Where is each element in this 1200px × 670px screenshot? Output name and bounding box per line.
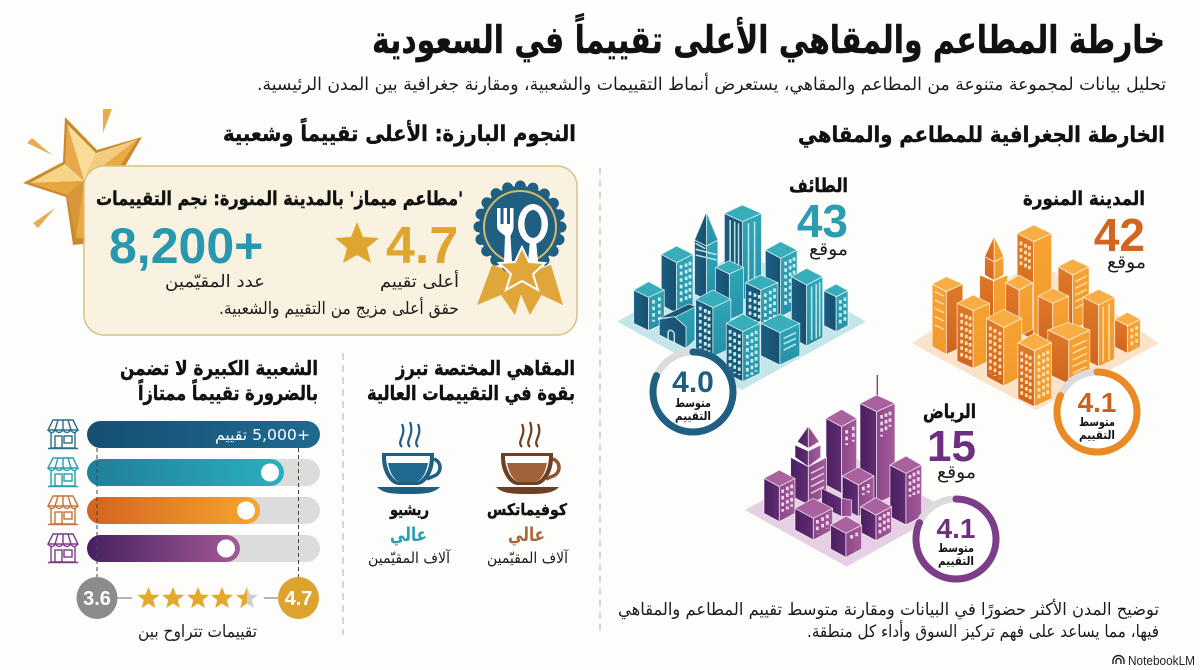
- high rating brown: عالي: [508, 524, 545, 546]
- map explanation text: توضيح المدن الأكثر حضورًا في البيانات ومقارنة متوسط تقييم المطاعم والمقاهي: [618, 599, 1159, 620]
- high rating teal: عالي: [390, 524, 427, 546]
- icon: store orange: [48, 496, 78, 524]
- icon: store purple: [48, 534, 78, 562]
- map explanation text: [618, 599, 1159, 642]
- Taif rating ring: [653, 352, 733, 432]
- reviewers value: 8,200+: [109, 218, 263, 274]
- reviewers note 2: آلاف المقيّمين: [368, 549, 451, 567]
- Medina rating ring: متوسط: [1079, 415, 1115, 430]
- heading: specialty coffee: [367, 356, 575, 406]
- heading: popularity: بالضرورة تقييماً ممتازاً: [138, 379, 318, 405]
- Medina rating ring: 4.1: [1078, 387, 1116, 418]
- Riyadh rating ring: متوسط: [938, 541, 974, 556]
- Taif rating ring: متوسط: [675, 396, 711, 411]
- Taif name: الطائف: [789, 175, 848, 197]
- Riyadh unit: موقع: [937, 462, 976, 483]
- Riyadh rating ring: التقييم: [938, 554, 974, 568]
- Taif count: 43: [797, 195, 848, 247]
- panel: specialty coffee: [367, 356, 575, 567]
- Medina count: 42: [1094, 209, 1145, 261]
- Medina rating ring: [1057, 372, 1137, 452]
- Taif unit: موقع: [809, 239, 848, 260]
- rating range scale: 3.6: [83, 588, 111, 610]
- reviewers label: عدد المقيّمين: [165, 272, 265, 292]
- heading: popularity: الشعبية الكبيرة لا تضمن: [120, 356, 318, 380]
- panel: Riyadh city: [745, 375, 996, 579]
- range caption: تقييمات تتراوح بين: [138, 622, 257, 642]
- map explanation text: فيها، مما يساعد على فهم تركيز السوق وأداء كل منطقة.: [807, 620, 1159, 642]
- rating range scale: [76, 577, 319, 619]
- Medina name: المدينة المنورة: [1023, 188, 1145, 210]
- heading: specialty coffee: بقوة في التقييمات العالية: [367, 381, 575, 406]
- heading: geographic map: الخارطة الجغرافية للمطاعم والمقاهي: [798, 123, 1165, 148]
- illustration: Medina buildings: [912, 225, 1159, 410]
- Taif rating ring: 4.0: [672, 366, 714, 399]
- card title: 'مطاعم ميماز' بالمدينة المنورة: نجم التقييمات: [96, 188, 463, 210]
- rating value: 4.7: [386, 217, 458, 275]
- panel: featured restaurant card: [84, 166, 577, 335]
- icon: big gold star: [23, 109, 142, 245]
- card note: حقق أعلى مزيج من التقييم والشعبية.: [219, 297, 459, 319]
- bar chart: [87, 421, 320, 577]
- Riyadh rating ring: 4.1: [937, 513, 975, 544]
- heading: top stars: النجوم البارزة: الأعلى تقييماً وشعبية: [223, 117, 576, 147]
- illustration: Riyadh buildings: [745, 375, 948, 567]
- rating label: أعلى تقييم: [380, 270, 459, 292]
- illustration: Taif buildings: [617, 205, 866, 390]
- icon: blue coffee cup: [377, 422, 440, 494]
- cafe name: Coffeematics: كوفيماتكس: [487, 500, 568, 519]
- Riyadh name: الرياض: [923, 401, 976, 423]
- icon: store navy: [48, 420, 78, 448]
- icon: rosette badge: [477, 186, 563, 315]
- subtitle: تحليل بيانات لمجموعة متنوعة من المطاعم والمقاهي، يستعرض أنماط التقييمات والشعبية، ومقارنة جغرافية بين المدن الرئيسية.: [257, 72, 1166, 95]
- bar chart: +5,000 تقييم: [215, 426, 310, 444]
- Medina unit: موقع: [1107, 252, 1146, 273]
- icon: rating star: [335, 222, 379, 263]
- divider: [599, 168, 601, 632]
- panel: Medina city: [912, 188, 1159, 452]
- Taif rating ring: التقييم: [675, 409, 711, 423]
- heading: specialty coffee: المقاهي المختصة تبرز: [395, 356, 575, 381]
- Riyadh rating ring: [916, 499, 996, 579]
- icon: store teal: [48, 458, 78, 486]
- Riyadh count: 15: [927, 422, 976, 471]
- heading: popularity: [120, 356, 318, 405]
- icon: brown coffee cup: [496, 422, 559, 494]
- cafe name: Richio: ريشيو: [389, 500, 429, 519]
- watermark: NotebookLM: NotebookLM: [1128, 654, 1195, 668]
- panel: popularity vs rating: [48, 356, 320, 642]
- panel: Taif city: [617, 175, 866, 432]
- rating range scale: 4.7: [285, 588, 312, 610]
- Medina rating ring: التقييم: [1079, 428, 1115, 442]
- reviewers note 1: آلاف المقيّمين: [487, 549, 569, 567]
